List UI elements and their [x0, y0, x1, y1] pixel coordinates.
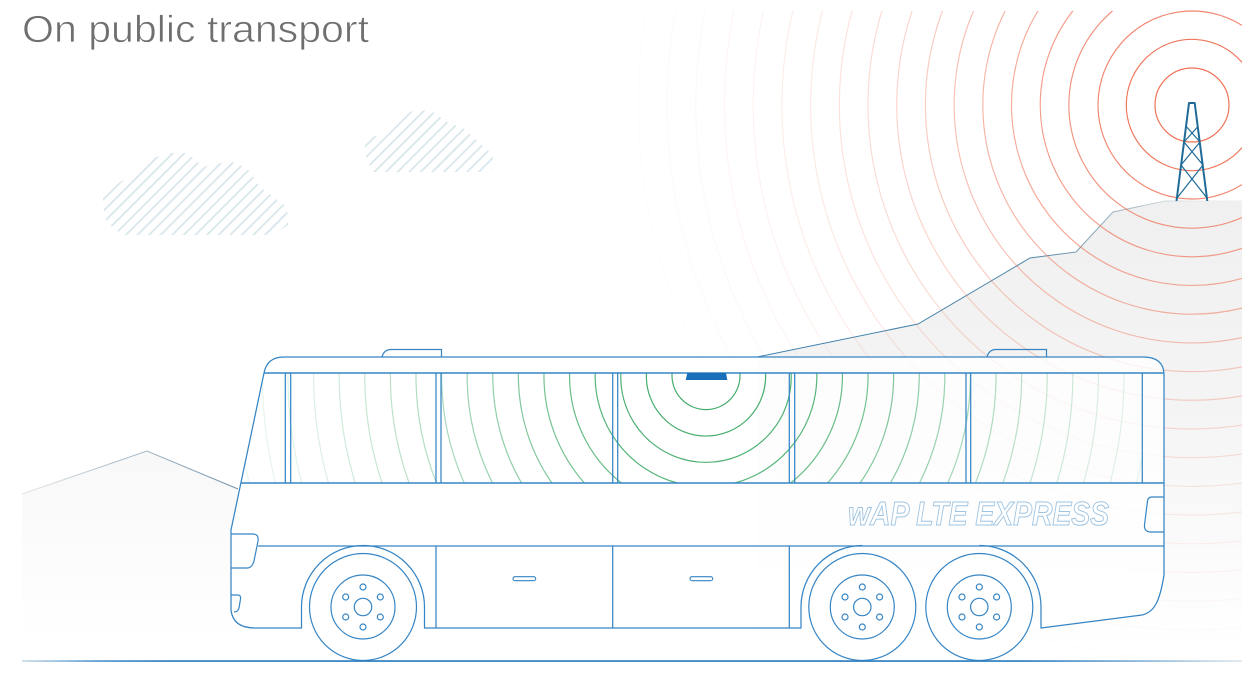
roof hatch left — [382, 350, 442, 357]
luggage handle right — [690, 577, 713, 581]
bus lettering: wAP LTE EXPRESS — [848, 495, 1109, 532]
left mountain — [22, 451, 238, 650]
luggage handle left — [513, 577, 536, 581]
green wifi rings inside windows — [237, 373, 1150, 483]
ground line — [22, 660, 1242, 662]
rear wheel two — [926, 554, 1033, 660]
orange signal rings from tower — [638, 11, 1242, 659]
bus outline and panel lines — [231, 357, 1164, 628]
front wheel — [310, 554, 416, 660]
front fog light — [231, 595, 241, 612]
right mountain — [757, 201, 1242, 650]
cloud: right hatched — [365, 110, 493, 172]
rear window — [1144, 497, 1164, 532]
roof hatch right — [987, 350, 1046, 357]
cloud: left hatched — [103, 153, 288, 235]
rear wheel one — [809, 554, 916, 660]
bus — [231, 350, 1164, 660]
icon: signal tower — [1176, 103, 1207, 201]
router — [686, 373, 727, 380]
title: On public transport — [22, 9, 369, 51]
bus body fill — [231, 357, 1164, 628]
front headlight — [231, 534, 258, 568]
